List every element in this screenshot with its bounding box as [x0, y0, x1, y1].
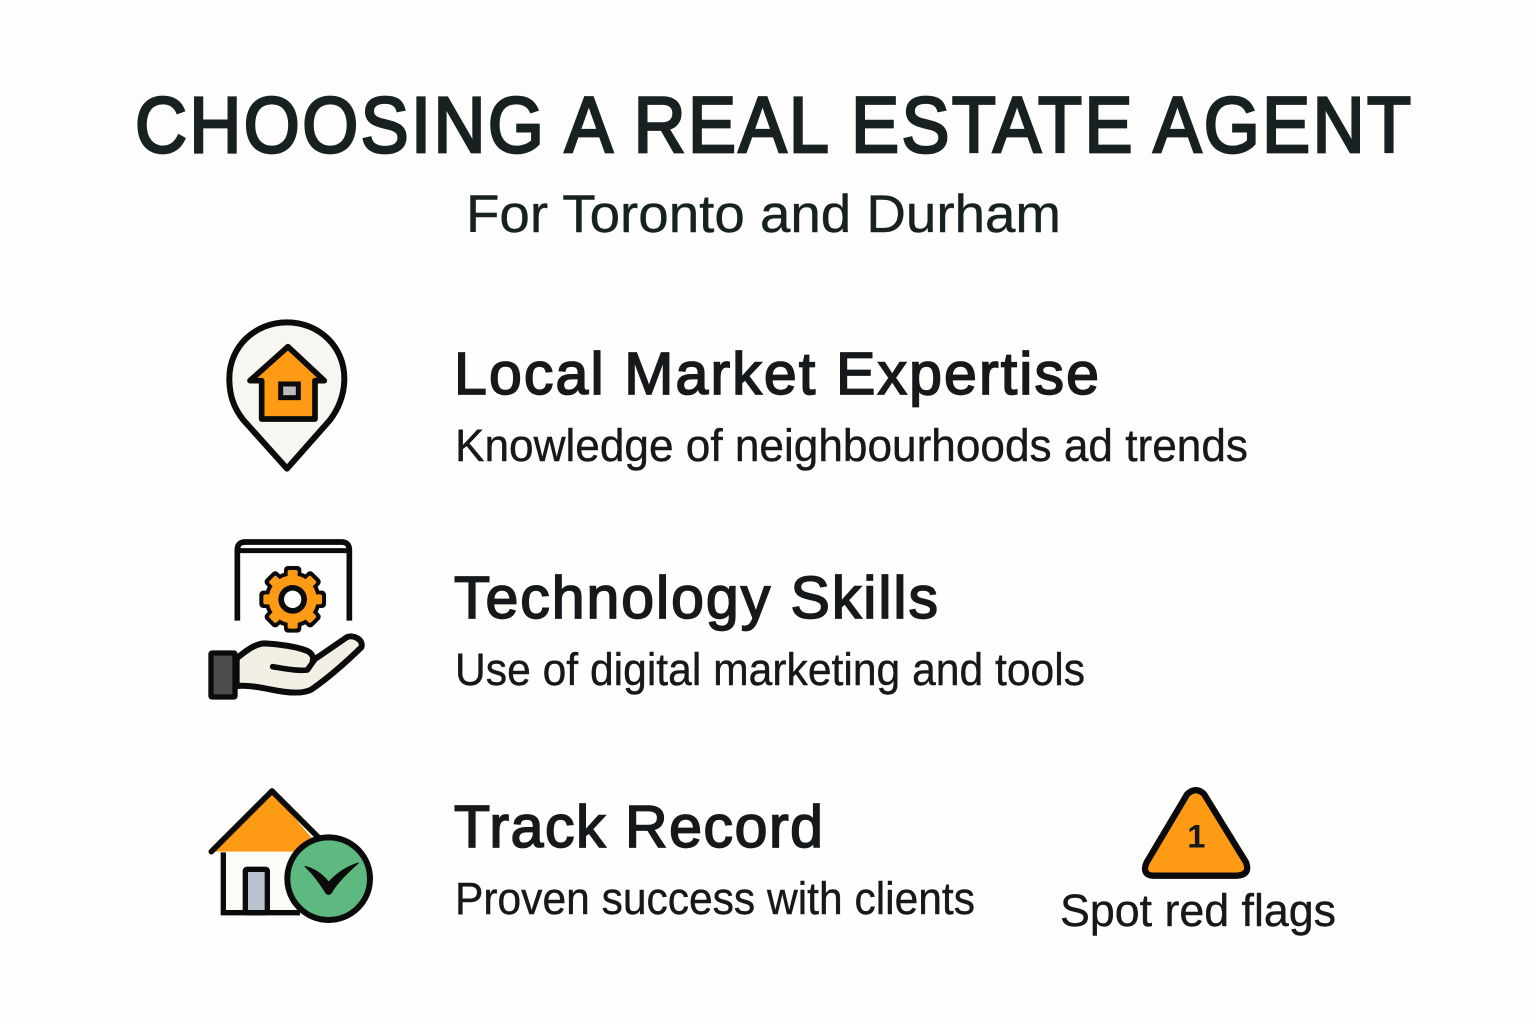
icon: warning triangle: [1145, 790, 1247, 876]
description: track record: Proven success with clients: [455, 873, 975, 924]
title: CHOOSING A REAL ESTATE AGENT: [135, 81, 1411, 170]
label: spot red flags: Spot red flags: [1060, 885, 1336, 936]
description: technology skills: Use of digital marketing and tools: [455, 644, 1085, 695]
icon: warning triangle: 1: [1187, 818, 1205, 855]
description: local market expertise: Knowledge of neighbourhoods ad trends: [455, 420, 1248, 471]
panel: technology skills: [108, 515, 1425, 740]
icon: house with green check: [211, 791, 370, 920]
icon: map pin with house: [229, 322, 344, 469]
panel: track record: [108, 750, 1425, 970]
heading: technology skills: Technology Skills: [454, 565, 938, 631]
panel: local market expertise: [108, 285, 1425, 510]
subtitle: For Toronto and Durham: [466, 185, 1061, 244]
heading: local market expertise: Local Market Expertise: [454, 341, 1099, 407]
heading: track record: Track Record: [454, 794, 823, 860]
icon: gear over hand: [211, 542, 362, 697]
